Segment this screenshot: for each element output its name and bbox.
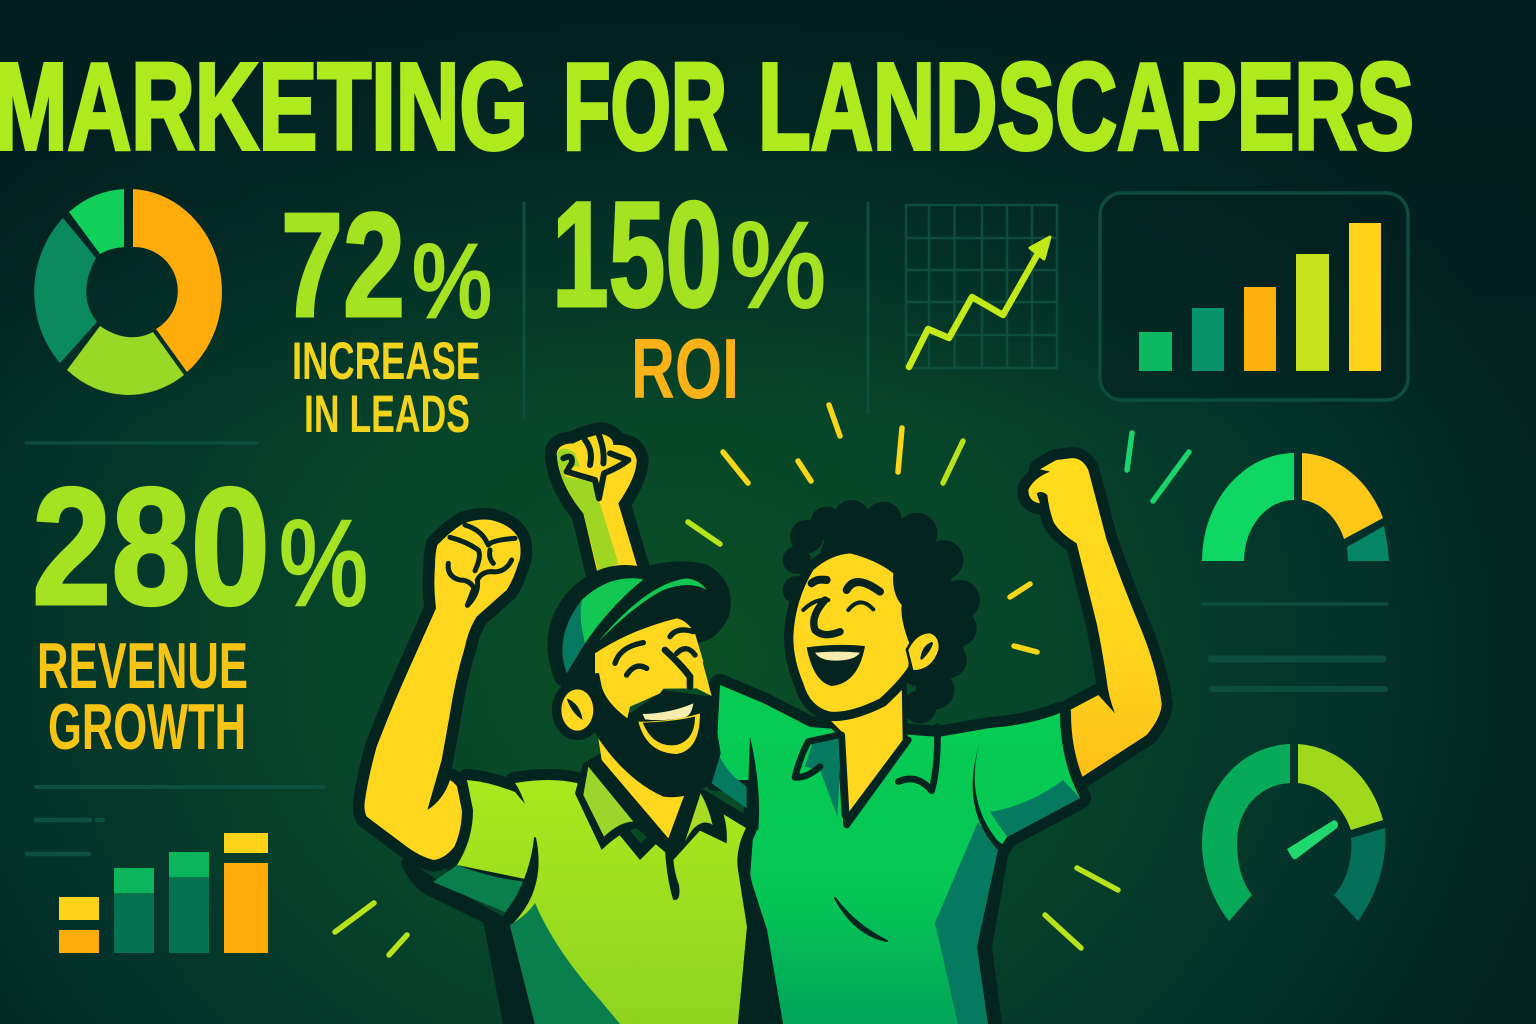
sleeve band [433,865,527,912]
stat: 72% increase in leads: % [412,224,492,340]
stat: 72% increase in leads: 72 [281,183,405,348]
line chart with arrow [906,205,1057,368]
left collar [805,735,842,817]
stat: 150% ROI: 150 [552,170,722,338]
neck [830,680,903,815]
stat: 150% ROI [552,170,826,417]
woman's head and collar [783,500,980,825]
man's head, cap and collar [557,571,759,860]
woman's raised right arm and fist [1028,458,1162,778]
side seam [973,745,1009,1024]
stat: 280% revenue growth: % [279,495,368,631]
stat: 280% revenue growth: GROWTH [48,690,246,763]
speedometer gauge [1202,744,1385,921]
stat: 280% revenue growth: REVENUE [37,629,248,702]
man's shirt [405,780,783,1024]
shirt lower shade [510,903,620,1024]
ear [908,633,939,670]
brows and eyes [812,580,880,592]
side shade [935,822,998,1024]
left collar [583,767,633,837]
mouth [807,645,865,686]
beard [565,653,721,797]
title: FOR [563,39,727,176]
sleeve band [990,780,1080,837]
hair [783,500,980,723]
mouth [638,713,700,754]
neck [598,738,685,838]
title [0,39,1414,176]
right collar [898,727,937,791]
right collar [685,793,713,842]
stat: 72% increase in leads [281,183,492,444]
semicircle gauge [1202,453,1389,561]
stat: 280% revenue growth [32,454,368,763]
teal shadow [712,753,747,808]
placket [666,850,678,899]
ear [561,689,593,731]
face [595,618,712,718]
sleeve seam [500,838,538,925]
stat: 72% increase in leads: IN LEADS [304,385,470,444]
chest crease [835,898,887,941]
illustration: two celebrating landscapers [364,433,1162,1024]
stat: 150% ROI: ROI [631,322,739,417]
stat: 72% increase in leads: INCREASE [292,332,480,391]
stacked bar chart [59,833,268,953]
woman's shirt [715,685,1080,1024]
face [793,553,910,712]
donut chart [34,189,222,395]
shoulder seam [747,737,759,830]
celebration rays [335,405,1189,955]
bar chart panel [1100,193,1408,400]
cap [557,571,721,677]
dark gap between figures [738,780,783,1024]
stat: 280% revenue growth: 280 [32,454,270,640]
title: MARKETING [0,39,528,176]
man's raised arm and fist [364,520,521,860]
woman's raised far fist and arm [557,433,638,577]
collar backing [575,753,727,860]
stat: 150% ROI: % [730,197,826,333]
